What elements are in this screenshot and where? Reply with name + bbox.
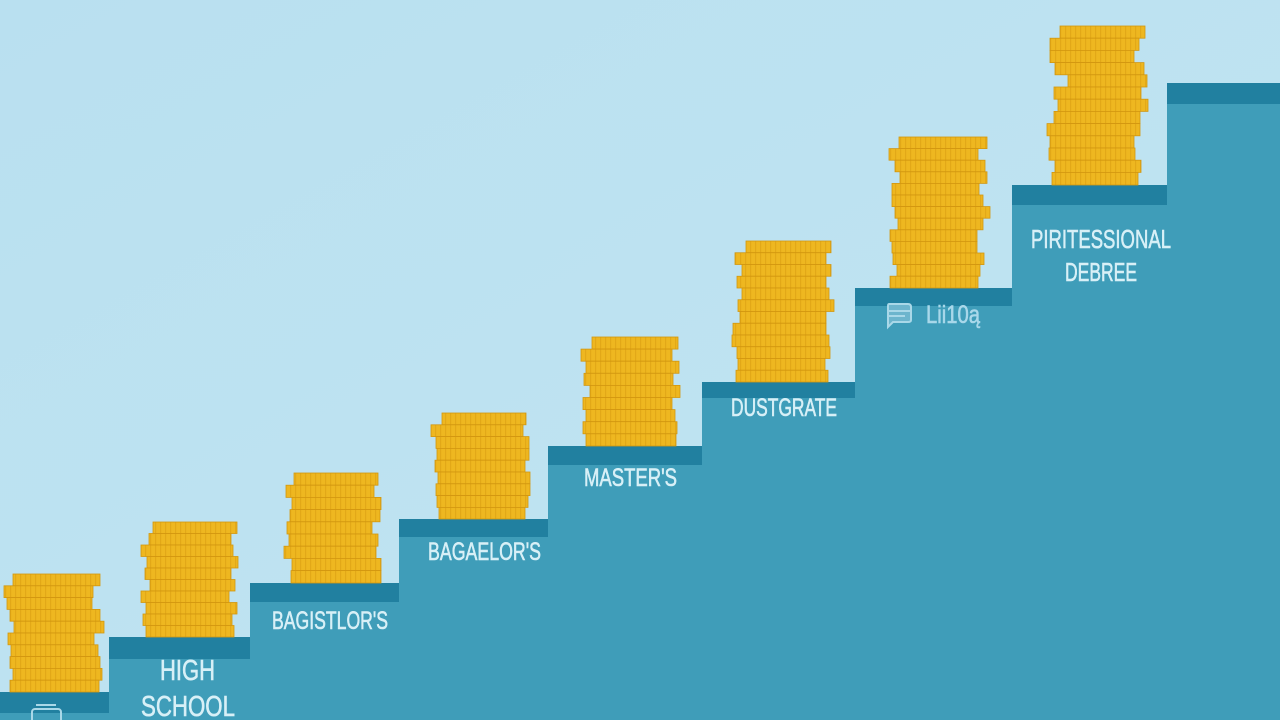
label: step 6: DUSTGRATE bbox=[731, 394, 837, 422]
label: step 7: Lii10ą bbox=[926, 301, 980, 329]
coin stack 4 bbox=[431, 413, 530, 519]
label: professional degree: DEBREE bbox=[1065, 257, 1137, 287]
label: professional degree: PIRITESSIONAL bbox=[1031, 224, 1171, 254]
coin stack 3 bbox=[284, 473, 381, 583]
label: step 3: BAGISTLOR'S bbox=[272, 607, 388, 635]
coin stack 6 bbox=[732, 241, 834, 382]
label: high school: HIGH bbox=[160, 655, 215, 687]
label: master's: MASTER'S bbox=[584, 464, 677, 492]
coin stack 5 bbox=[581, 337, 680, 446]
label: high school bbox=[141, 655, 235, 720]
coin stack 1 bbox=[4, 574, 104, 692]
icon: message card bbox=[888, 304, 911, 327]
coin stack 2 bbox=[141, 522, 238, 637]
label: professional degree bbox=[1031, 224, 1171, 287]
icon: bottom step card bbox=[32, 705, 61, 720]
coin stack 7 bbox=[889, 137, 990, 288]
coin stack 8 bbox=[1047, 26, 1148, 185]
label: step 4: BAGAELOR'S bbox=[428, 538, 541, 566]
